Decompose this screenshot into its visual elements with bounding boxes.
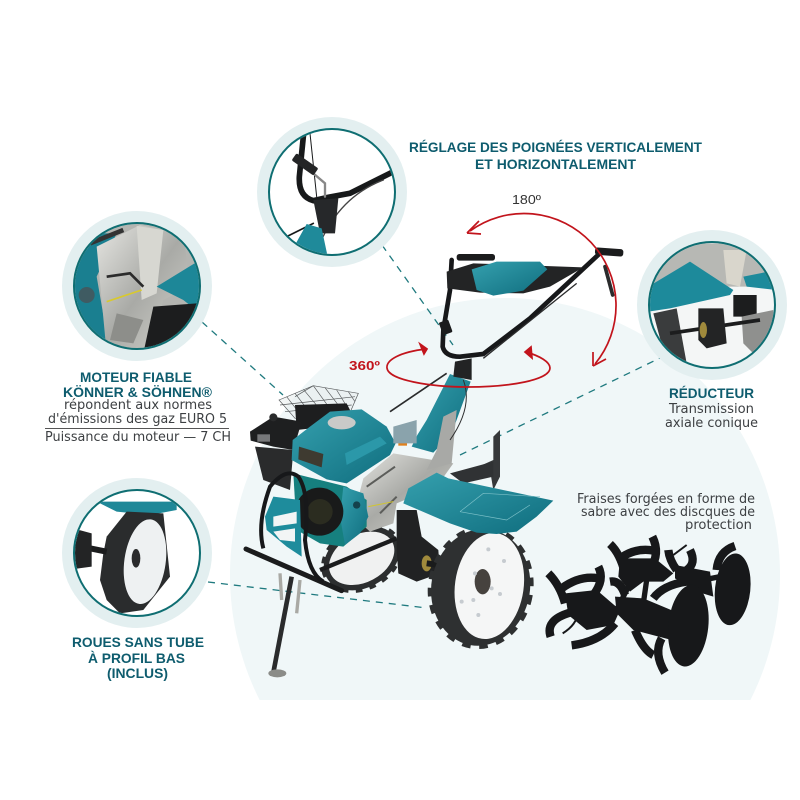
callout circle: handle detail xyxy=(257,117,407,267)
text block: tines: sabre avec des discques de xyxy=(581,505,755,520)
heading: handle adjustment: ET HORIZONTALEMENT xyxy=(475,156,636,172)
handlebar xyxy=(439,247,624,358)
text block: tines: Fraises forgées en forme de xyxy=(577,492,755,507)
rear hitch xyxy=(450,430,500,490)
rear wheel xyxy=(312,513,412,604)
text block: engine: d'émissions des gaz EURO 5 xyxy=(48,412,227,427)
text block: wheels: À PROFIL BAS xyxy=(88,650,185,666)
text block: engine: KÖNNER & SÖHNEN® xyxy=(63,384,213,400)
fuel tank xyxy=(292,409,396,483)
front wheel xyxy=(420,519,541,655)
column xyxy=(390,358,472,470)
illustration: rotary tines xyxy=(548,537,754,673)
text block: tines: protection xyxy=(685,518,752,533)
gearbox silver xyxy=(353,438,453,532)
label 360 degrees: 360º xyxy=(349,358,380,373)
heading: handle adjustment: RÉGLAGE DES POIGNÉES VERTICALEMENT xyxy=(409,139,702,155)
dashed connector: handle xyxy=(382,245,453,345)
text block: engine xyxy=(45,369,231,445)
background blob xyxy=(230,298,780,700)
starter cover xyxy=(293,473,368,547)
callout circle: wheel detail xyxy=(62,478,212,628)
front guard xyxy=(261,473,323,582)
text block: gearbox: axiale conique xyxy=(665,416,758,431)
heading: handle adjustment xyxy=(409,139,702,172)
text block: gearbox: Transmission xyxy=(668,402,754,417)
engine black housing xyxy=(250,403,357,490)
rotation arrow 180 xyxy=(467,213,616,366)
label 180 degrees: 180º xyxy=(512,192,541,207)
front gear axle xyxy=(397,510,447,582)
text block: gearbox xyxy=(665,385,758,431)
fender xyxy=(403,473,553,534)
text block: engine: MOTEUR FIABLE xyxy=(80,369,192,385)
stand and frame xyxy=(246,538,397,677)
text block: wheels: (INCLUS) xyxy=(107,665,168,681)
dashed connector: gearbox xyxy=(460,358,660,455)
dashed connector: engine xyxy=(202,322,283,395)
text block: tines xyxy=(577,492,755,533)
callout circle: engine detail xyxy=(62,211,212,361)
text block: wheels: ROUES SANS TUBE xyxy=(72,634,204,650)
air filter basket xyxy=(279,386,358,418)
dashed connector: wheel xyxy=(208,582,427,608)
rotation arrow 360 xyxy=(387,344,550,387)
text block: gearbox: RÉDUCTEUR xyxy=(669,385,754,401)
machine: tiller xyxy=(246,247,624,677)
infographic xyxy=(45,117,787,700)
text block: engine: Puissance du moteur — 7 CH xyxy=(45,430,231,445)
text block: wheels xyxy=(72,634,204,681)
callout circle: gearbox detail xyxy=(637,230,787,380)
text block: engine: répondent aux normes xyxy=(64,398,212,413)
